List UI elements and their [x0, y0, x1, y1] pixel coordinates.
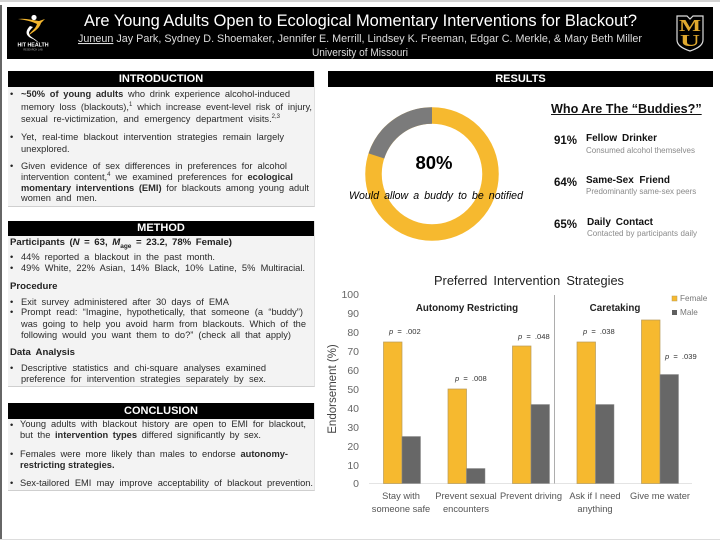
panel: introduction — [8, 71, 315, 207]
p values: p = .002 — [388, 327, 421, 336]
p values: p = .038 — [582, 327, 615, 336]
text block: conclusion bullets: Females were more likely than males to endorse autonomy- — [20, 449, 288, 459]
y axis labels: 40 — [347, 403, 359, 415]
heading: introduction: INTRODUCTION — [119, 73, 203, 85]
text block: conclusion bullets: • — [10, 420, 13, 430]
group headings: Caretaking — [590, 303, 640, 314]
icon: HIT Health logo — [17, 14, 49, 52]
category labels: Stay with — [382, 491, 420, 501]
heading: method: METHOD — [137, 222, 185, 234]
icon: HIT Health logo: HIT HEALTH — [17, 42, 49, 48]
stat: same-sex friend: Predominantly same-sex peers — [586, 187, 696, 196]
female bars — [384, 320, 660, 484]
text block: conclusion bullets: restricting strategies. — [20, 460, 115, 470]
p values — [388, 327, 697, 383]
text block: participants: Participants (N = 63, Mage = 23.2, 78% Female) — [10, 237, 232, 250]
stat: same-sex friend — [554, 175, 696, 196]
category labels: Prevent driving — [500, 491, 562, 501]
text block: introduction bullets: Yet, real-time blackout intervention strategies remain largely — [21, 132, 284, 142]
donut chart: 80% — [415, 152, 453, 173]
icon: Mizzou MU shield: M — [679, 16, 701, 35]
text block: participants: • — [10, 252, 13, 262]
p values: p = .048 — [517, 332, 550, 341]
panel: conclusion — [8, 403, 315, 491]
text block: introduction bullets: sexual re-victimization, and emergency department visits.2,3 — [21, 114, 280, 124]
stat: same-sex friend: Same-Sex Friend — [586, 175, 670, 186]
text block: conclusion bullets: but the intervention types differed significantly by sex. — [20, 430, 261, 440]
panel: results — [328, 71, 713, 87]
text block: participants: • — [10, 263, 13, 273]
panel: results: RESULTS — [495, 73, 546, 85]
text block: data analysis — [10, 347, 266, 384]
p values: p = .008 — [454, 374, 487, 383]
text block: introduction bullets: Given evidence of sex differences in preferences for alcohol — [21, 161, 287, 171]
authors: Juneun Jay Park, Sydney D. Shoemaker, Jennifer E. Merrill, Lindsey K. Freeman, Edgar C. Merkle, & Mary Beth Miller — [78, 33, 642, 45]
y axis title: Endorsement (%) — [327, 344, 339, 434]
group headings — [416, 303, 640, 314]
y axis labels: 90 — [347, 308, 359, 320]
y axis labels: 50 — [347, 384, 359, 396]
text block: introduction bullets: momentary interventions (EMI) for blackouts among young adult — [21, 183, 309, 193]
text block: data analysis: • — [10, 363, 13, 373]
heading: conclusion — [8, 403, 314, 419]
y axis labels — [341, 289, 359, 490]
text block: introduction bullets: women and men. — [21, 193, 97, 203]
text block: conclusion bullets: Sex-tailored EMI may improve acceptability of blackout prevention. — [20, 478, 313, 488]
bar chart: preferred intervention strategies — [327, 273, 708, 514]
text block: data analysis: preference for intervention strategies separately by sex. — [21, 374, 266, 384]
heading: method — [8, 221, 314, 236]
text block: conclusion bullets — [10, 419, 313, 488]
header banner — [7, 7, 713, 59]
heading: who are the buddies: Who Are The “Buddies?” — [551, 102, 702, 116]
y axis labels: 30 — [347, 422, 359, 434]
text block: procedure: Prompt read: “Imagine, hypothetically, that someone (a “buddy”) — [21, 307, 303, 317]
text block: procedure: was going to help you avoid harm from blackouts. Which of the — [21, 319, 306, 329]
text block: introduction bullets: • — [10, 161, 13, 171]
legend: Female — [680, 294, 708, 303]
donut chart — [349, 107, 524, 241]
category labels: anything — [577, 504, 613, 514]
y axis labels: 80 — [347, 327, 359, 339]
text block: introduction bullets: intervention content,4 we examined preferences for ecological — [21, 172, 293, 182]
stat: same-sex friend: 64% — [554, 177, 577, 189]
category labels — [372, 491, 690, 514]
text block: data analysis: Data Analysis — [10, 347, 75, 358]
text block: introduction bullets: ~50% of young adults who drink experience alcohol-induced — [21, 89, 290, 99]
donut chart: Would allow a buddy to be notified — [349, 190, 524, 202]
y axis labels: 0 — [353, 478, 359, 490]
stat: fellow drinker: 91% — [554, 135, 577, 147]
heading: introduction — [8, 71, 314, 87]
heading: conclusion: CONCLUSION — [124, 405, 198, 417]
stat: daily contact: 65% — [554, 219, 577, 231]
stat: fellow drinker — [554, 133, 695, 155]
category labels: Ask if I need — [569, 491, 621, 501]
legend: Male — [680, 308, 698, 317]
stat: fellow drinker: Consumed alcohol themselves — [586, 146, 695, 155]
category labels: Give me water — [630, 491, 690, 501]
y axis labels: 60 — [347, 365, 359, 377]
icon: Mizzou MU shield — [676, 15, 704, 52]
text block: introduction bullets: • — [10, 89, 13, 99]
text block: procedure: • — [10, 297, 13, 307]
category labels: Prevent sexual — [435, 491, 497, 501]
text block: procedure: following would you want them to do?” (check all that apply) — [21, 330, 291, 340]
y axis labels: 70 — [347, 346, 359, 358]
text block: introduction bullets — [10, 89, 312, 203]
text block: participants: 49% White, 22% Asian, 14% Black, 10% Latine, 5% Multiracial. — [21, 263, 305, 273]
text block: conclusion bullets: Young adults with blackout history are open to EMI for blackout, — [20, 419, 306, 429]
y axis labels: 10 — [347, 460, 359, 472]
text block: data analysis: Descriptive statistics and chi-square analyses examined — [21, 363, 266, 373]
y axis labels: 100 — [341, 289, 359, 301]
text block: introduction bullets: • — [10, 132, 13, 142]
text block: participants: 44% reported a blackout in the past month. — [21, 252, 215, 262]
text block: conclusion bullets: • — [10, 478, 13, 488]
stat: daily contact: Contacted by participants daily — [587, 229, 697, 238]
text block: procedure: Procedure — [10, 281, 57, 292]
stat: daily contact — [554, 217, 697, 238]
legend — [672, 294, 708, 317]
p values: p = .039 — [664, 352, 697, 361]
category labels: someone safe — [372, 504, 430, 514]
text block: procedure: Exit survey administered after 30 days of EMA — [21, 297, 229, 307]
text block: conclusion bullets: • — [10, 449, 13, 459]
title: Are Young Adults Open to Ecological Momentary Interventions for Blackout? — [84, 11, 637, 30]
text block: procedure: • — [10, 307, 13, 317]
text block: participants — [10, 237, 305, 273]
stat: fellow drinker: Fellow Drinker — [586, 133, 657, 144]
group headings: Autonomy Restricting — [416, 303, 518, 314]
text block: introduction bullets: unexplored. — [21, 144, 70, 154]
y axis labels: 20 — [347, 441, 359, 453]
panel: method — [8, 221, 315, 387]
text block: introduction bullets: memory loss (blackouts),1 which increase event-level risk of injury, — [21, 102, 312, 112]
affiliation: University of Missouri — [312, 47, 408, 59]
icon: Mizzou MU shield: U — [680, 31, 700, 50]
text block: procedure — [10, 281, 306, 340]
icon: HIT Health logo: RESEARCH LAB — [23, 48, 43, 52]
category labels: encounters — [443, 504, 489, 514]
header text — [78, 11, 642, 59]
chart title: Preferred Intervention Strategies — [434, 273, 624, 288]
male bars — [402, 374, 678, 484]
stat: daily contact: Daily Contact — [587, 217, 653, 228]
